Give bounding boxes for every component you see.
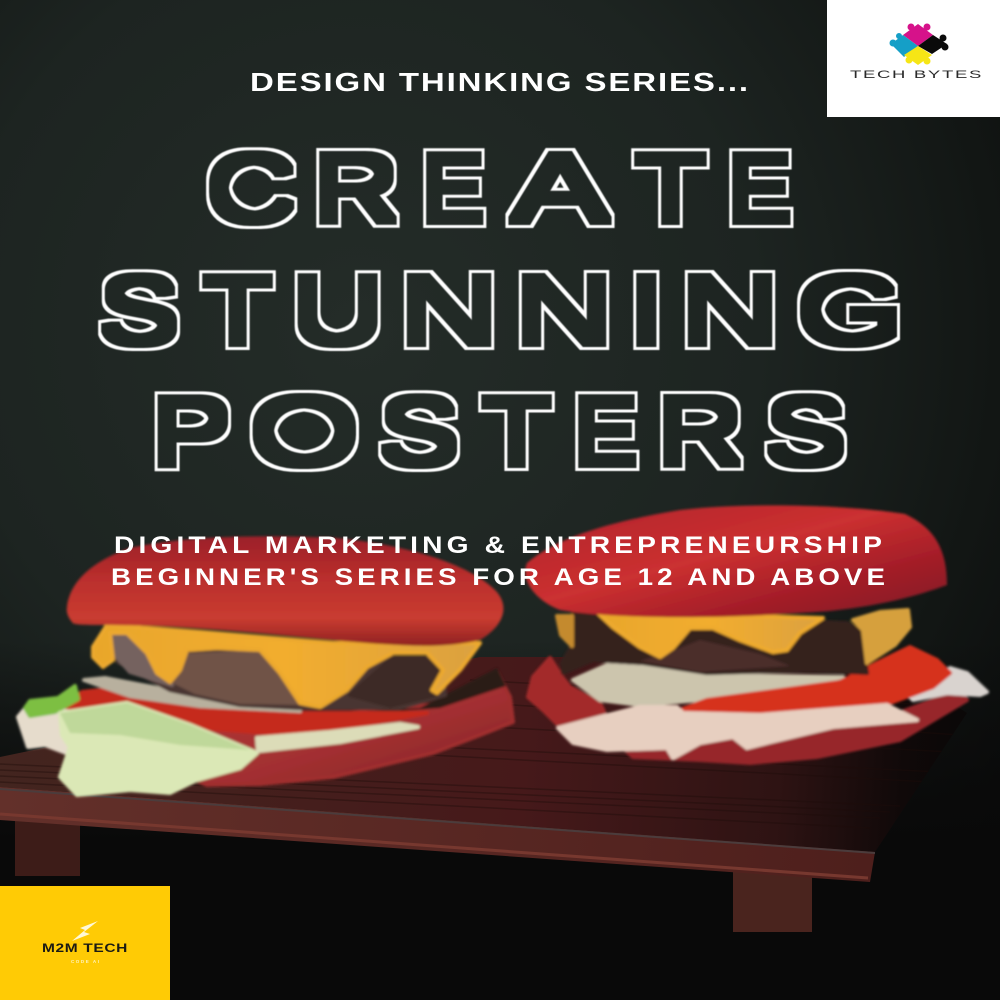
lettuce: pale leaves xyxy=(60,703,257,795)
title: create stunning posters xyxy=(100,135,903,485)
icon: lightning bolt xyxy=(72,921,98,941)
heading: series line: DESIGN THINKING SERIES... xyxy=(250,67,750,97)
table top surface xyxy=(0,657,967,852)
title line: STUNNING: I xyxy=(628,257,664,364)
sauce xyxy=(18,700,120,760)
bottom bun xyxy=(620,690,967,763)
title line: POSTERS: S xyxy=(380,378,459,485)
title line: POSTERS: R xyxy=(658,378,742,485)
patty xyxy=(562,613,867,673)
title line: CREATE: R xyxy=(314,135,398,242)
bottom bun left side xyxy=(528,658,610,727)
chicken layer xyxy=(558,705,917,758)
title line: POSTERS: O xyxy=(250,378,359,485)
title line: STUNNING: N xyxy=(400,257,498,364)
icon: jigsaw puzzle xyxy=(890,24,948,65)
logo panel xyxy=(0,886,170,1000)
top bun xyxy=(525,505,947,617)
table leg: left xyxy=(15,815,80,876)
title line: POSTERS: E xyxy=(575,378,636,485)
top bun xyxy=(67,536,503,646)
burger: left xyxy=(18,536,513,795)
bottom bun xyxy=(150,672,513,785)
tomato slice xyxy=(66,690,427,733)
title line: CREATE: A xyxy=(512,135,608,242)
wooden table xyxy=(0,657,967,932)
table leg: right xyxy=(733,870,812,932)
logo: m2m tech xyxy=(0,886,170,1000)
title line: POSTERS: S xyxy=(766,378,846,485)
title line: POSTERS: P xyxy=(152,378,230,485)
onion slice xyxy=(573,665,843,705)
logo: tech bytes xyxy=(827,0,1000,117)
burger: right xyxy=(525,505,987,763)
title line: CREATE: T xyxy=(636,135,705,242)
title line: CREATE: C xyxy=(207,135,295,242)
logo panel xyxy=(827,0,1000,117)
logo tagline: CODE AI xyxy=(71,959,99,964)
title line: STUNNING: T xyxy=(204,257,271,364)
logo text: TECH BYTES xyxy=(850,69,983,81)
lettuce: bright green xyxy=(25,686,78,716)
logo name: M2M TECH xyxy=(42,941,128,955)
table front face xyxy=(0,787,875,882)
title line: STUNNING: N xyxy=(515,257,613,364)
dark layer under patty xyxy=(240,668,506,716)
title line: STUNNING: N xyxy=(681,257,779,364)
title line: POSTERS: T xyxy=(483,378,550,485)
white layer xyxy=(910,668,987,700)
subtitle xyxy=(111,532,889,591)
title line: STUNNING: U xyxy=(292,257,383,364)
subtitle line 2: BEGINNER'S SERIES FOR AGE 12 AND ABOVE xyxy=(111,564,889,591)
cheese xyxy=(93,625,480,707)
title line: STUNNING: S xyxy=(100,257,179,364)
onion layer xyxy=(84,678,300,711)
tomato slice xyxy=(680,647,950,713)
subtitle line 1: DIGITAL MARKETING & ENTREPRENEURSHIP xyxy=(114,532,886,559)
title line: CREATE: E xyxy=(423,135,483,242)
patty xyxy=(110,630,445,708)
title line: STUNNING: G xyxy=(797,257,903,364)
cheese xyxy=(597,612,823,657)
title line: CREATE: E xyxy=(729,135,790,242)
